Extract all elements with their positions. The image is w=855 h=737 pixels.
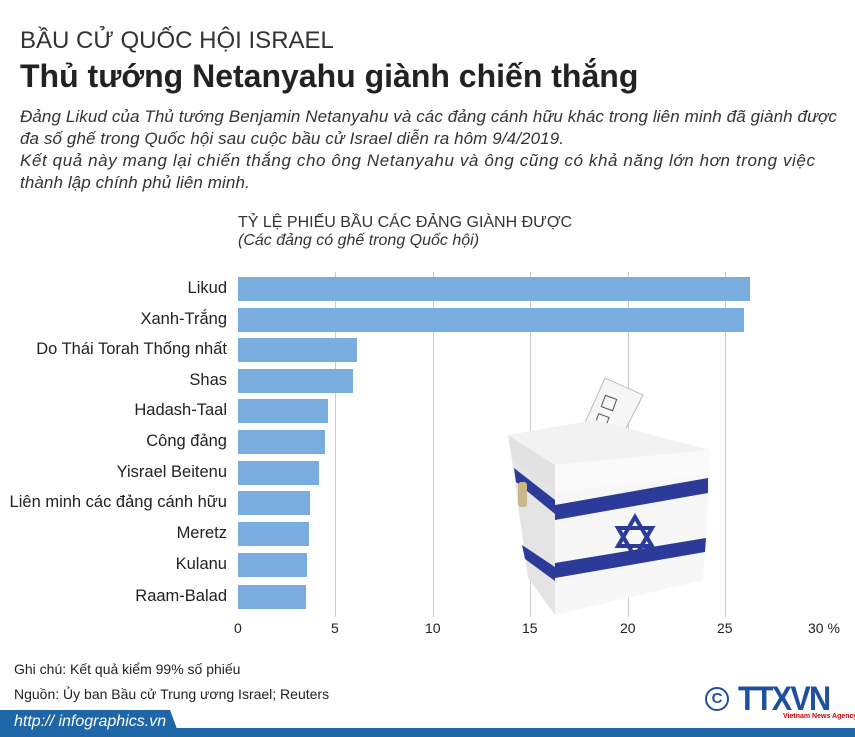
chart title: TỶ LỆ PHIẾU BẦU CÁC ĐẢNG GIÀNH ĐƯỢC bbox=[238, 214, 572, 231]
bar chart: Likud bbox=[188, 279, 227, 297]
bar chart: Shas bbox=[189, 371, 227, 389]
intro text: Kết quả này mang lại chiến thắng cho ông Netanyahu và ông cũng có khả năng lớn hơn trong việc bbox=[20, 151, 816, 170]
chart title bbox=[238, 213, 572, 249]
intro text: đa số ghế trong Quốc hội sau cuộc bầu cử Israel diễn ra hôm 9/4/2019. bbox=[20, 129, 564, 148]
bar chart: 30 % bbox=[808, 620, 840, 636]
intro text: Đảng Likud của Thủ tướng Benjamin Netanyahu và các đảng cánh hữu khác trong liên minh đã giành được bbox=[20, 107, 837, 126]
bar chart: 5 bbox=[331, 620, 339, 636]
bar chart: Xanh-Trắng bbox=[140, 310, 227, 328]
bar chart: Yisrael Beitenu bbox=[117, 463, 227, 481]
bar chart: 15 bbox=[522, 620, 538, 636]
bar chart: Raam-Balad bbox=[135, 587, 227, 605]
bar chart: Kulanu bbox=[176, 555, 227, 573]
bar chart: Hadash-Taal bbox=[134, 401, 227, 419]
bar chart: 10 bbox=[425, 620, 441, 636]
source: Nguồn: Ủy ban Bầu cử Trung ương Israel; Reuters bbox=[14, 686, 329, 702]
logo: TTXVN: C bbox=[712, 690, 722, 707]
bar chart: 0 bbox=[234, 620, 242, 636]
footer bar bbox=[0, 710, 855, 737]
supertitle: BẦU CỬ QUỐC HỘI ISRAEL bbox=[20, 27, 334, 54]
bar chart bbox=[10, 272, 840, 636]
chart title: (Các đảng có ghế trong Quốc hội) bbox=[238, 232, 479, 249]
logo: TTXVN bbox=[705, 680, 855, 720]
bar chart: Meretz bbox=[177, 524, 227, 542]
intro text: thành lập chính phủ liên minh. bbox=[20, 173, 250, 192]
bar chart: 20 bbox=[620, 620, 636, 636]
note: Ghi chú: Kết quả kiểm 99% số phiếu bbox=[14, 661, 240, 677]
bar chart: Liên minh các đảng cánh hữu bbox=[10, 493, 227, 511]
intro text bbox=[20, 107, 837, 192]
bar chart: Công đảng bbox=[146, 432, 227, 450]
bar chart: 25 bbox=[717, 620, 733, 636]
icon: ballot box bbox=[508, 378, 709, 615]
title: Thủ tướng Netanyahu giành chiến thắng bbox=[20, 58, 638, 94]
bar chart: Do Thái Torah Thống nhất bbox=[36, 340, 227, 358]
footer bar: http:// infographics.vn bbox=[14, 713, 166, 730]
logo: TTXVN: TTXVN bbox=[738, 680, 829, 718]
